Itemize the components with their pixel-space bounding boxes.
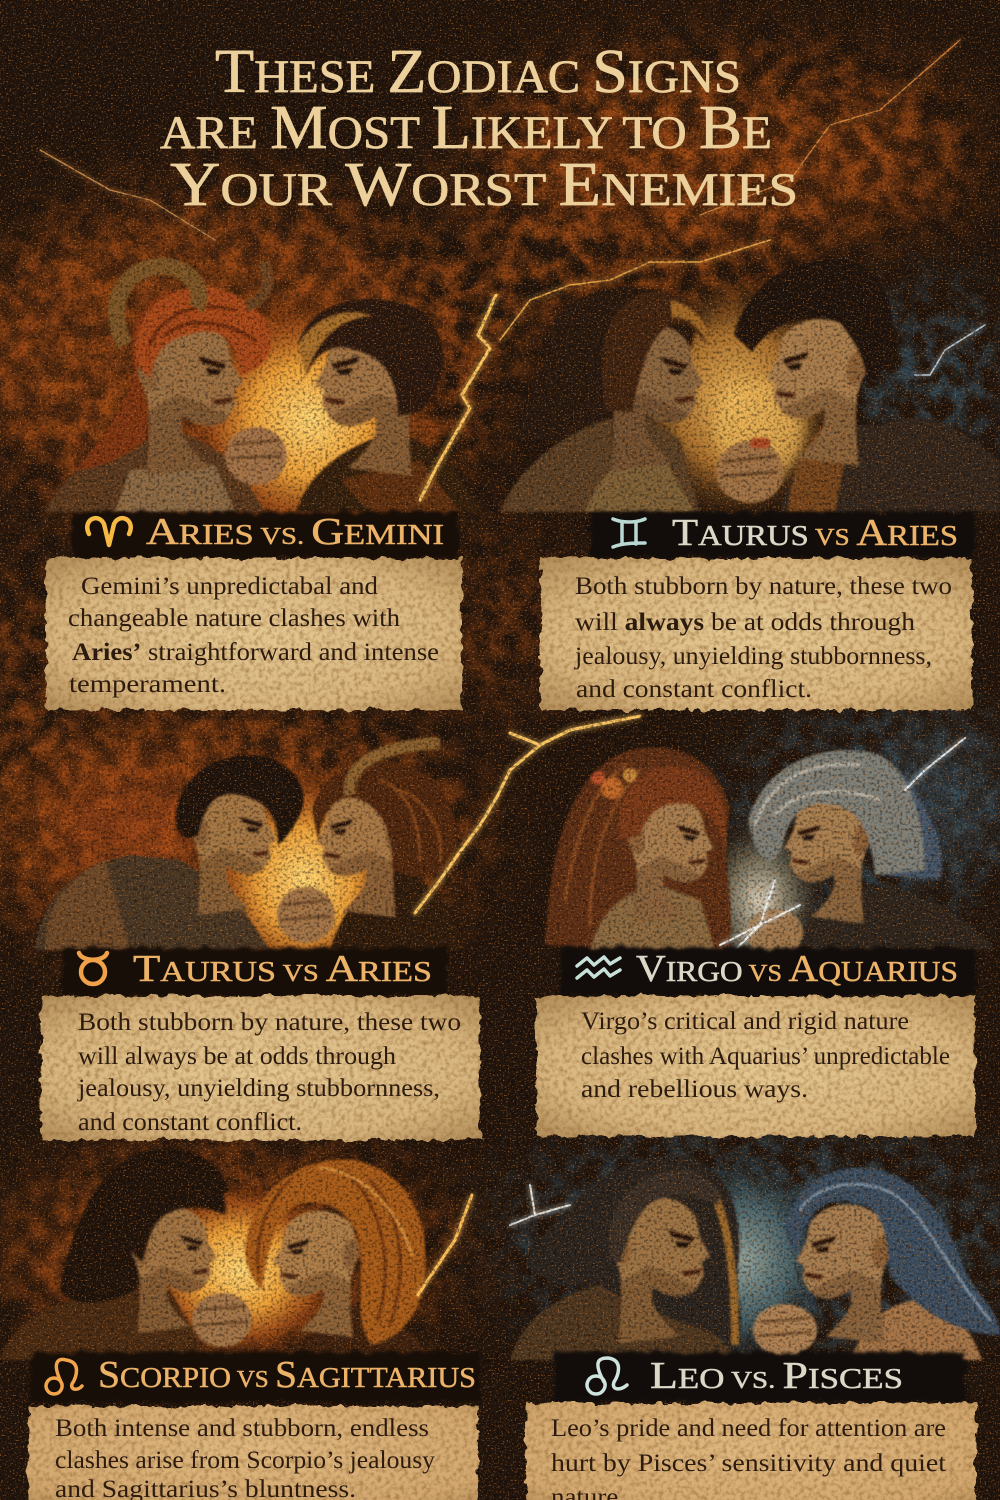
body text: Gemini’s unpredictabal and — [81, 573, 379, 600]
card: Taurus vs Aries (top right) — [541, 512, 975, 710]
title: YOUR WORST ENEMIES — [170, 151, 798, 219]
heading bar — [30, 1352, 480, 1402]
heading bar — [560, 948, 975, 996]
panel art: Leo vs Pisces — [510, 1155, 1000, 1365]
heading bar — [555, 1352, 965, 1402]
panel art: Virgo vs Aquarius — [545, 730, 1000, 985]
card: Taurus vs Aries (middle left) — [41, 948, 480, 1140]
body text: Leo’s pride and need for attention are — [551, 1415, 946, 1442]
heading bar — [62, 948, 447, 996]
icon: Aquarius symbol — [577, 957, 620, 978]
card: Aries vs Gemini — [46, 511, 462, 710]
body text: jealousy, unyielding stubbornness, — [574, 643, 932, 670]
panel art: Taurus vs Aries (top right) — [500, 258, 1000, 525]
body text: and constant conflict. — [78, 1109, 302, 1136]
body text: Both intense and stubborn, endless — [55, 1415, 429, 1442]
body text: clashes arise from Scorpio’s jealousy — [55, 1447, 436, 1474]
body text: jealousy, unyielding stubbornness, — [77, 1075, 440, 1102]
body text: will always be at odds through — [78, 1043, 397, 1070]
title — [160, 38, 798, 219]
body text: Aries’ straightforward and intense — [72, 639, 439, 666]
body text — [77, 1009, 461, 1136]
body text: and rebellious ways. — [581, 1076, 808, 1103]
lightning bolts — [40, 40, 985, 1295]
card: Scorpio vs Sagittarius — [29, 1352, 480, 1500]
panel art: Aries vs Gemini — [45, 262, 478, 545]
cool mottled glow: right column — [500, 290, 1000, 1350]
body text — [581, 1008, 950, 1103]
body text: Virgo’s critical and rigid nature — [581, 1008, 909, 1035]
title: THESE ZODIAC SIGNS — [215, 38, 741, 106]
card: Leo vs Pisces — [526, 1352, 976, 1500]
body text: will always be at odds through — [575, 609, 916, 636]
panel art: Scorpio vs Sagittarius — [0, 1148, 430, 1360]
body text — [55, 1415, 436, 1500]
icon: Aries symbol — [87, 518, 131, 545]
soft ember underglow — [0, 100, 940, 1340]
heading text: ARIES VS. GEMINI — [146, 511, 444, 553]
body text — [551, 1415, 946, 1500]
parchment — [541, 558, 972, 710]
body text: Both stubborn by nature, these two — [78, 1009, 461, 1036]
icon: Leo symbol (orange) — [46, 1359, 82, 1394]
heading text: LEO VS. PISCES — [650, 1355, 903, 1397]
parchment — [46, 558, 462, 710]
panel art: Taurus vs Aries (middle left) — [35, 743, 465, 995]
body text — [68, 573, 439, 698]
parchment — [41, 996, 480, 1140]
heading text: TAURUS VS ARIES — [133, 948, 432, 990]
heading bar — [72, 512, 458, 558]
card: Virgo vs Aquarius — [536, 948, 975, 1136]
parchment — [526, 1403, 976, 1500]
parchment — [536, 996, 975, 1136]
heading text: VIRGO VS AQUARIUS — [636, 948, 958, 990]
body text: changeable nature clashes with — [68, 605, 401, 632]
heading text: SCORPIO VS SAGITTARIUS — [98, 1354, 476, 1396]
body text — [574, 573, 952, 703]
icon: Leo symbol (pale) — [587, 1358, 627, 1394]
title: ARE MOST LIKELY TO BE — [160, 94, 772, 162]
body text: Both stubborn by nature, these two — [575, 573, 952, 600]
icon: Taurus symbol — [79, 953, 107, 984]
heading bar — [590, 512, 975, 558]
heading text: TAURUS VS ARIES — [672, 512, 958, 554]
icon: Gemini symbol — [613, 519, 645, 547]
body text: temperament. — [69, 671, 226, 698]
body text: clashes with Aquarius’ unpredictable — [581, 1043, 950, 1070]
body text: hurt by Pisces’ sensitivity and quiet — [551, 1450, 946, 1477]
body text: and constant conflict. — [576, 676, 812, 703]
parchment — [29, 1406, 478, 1500]
